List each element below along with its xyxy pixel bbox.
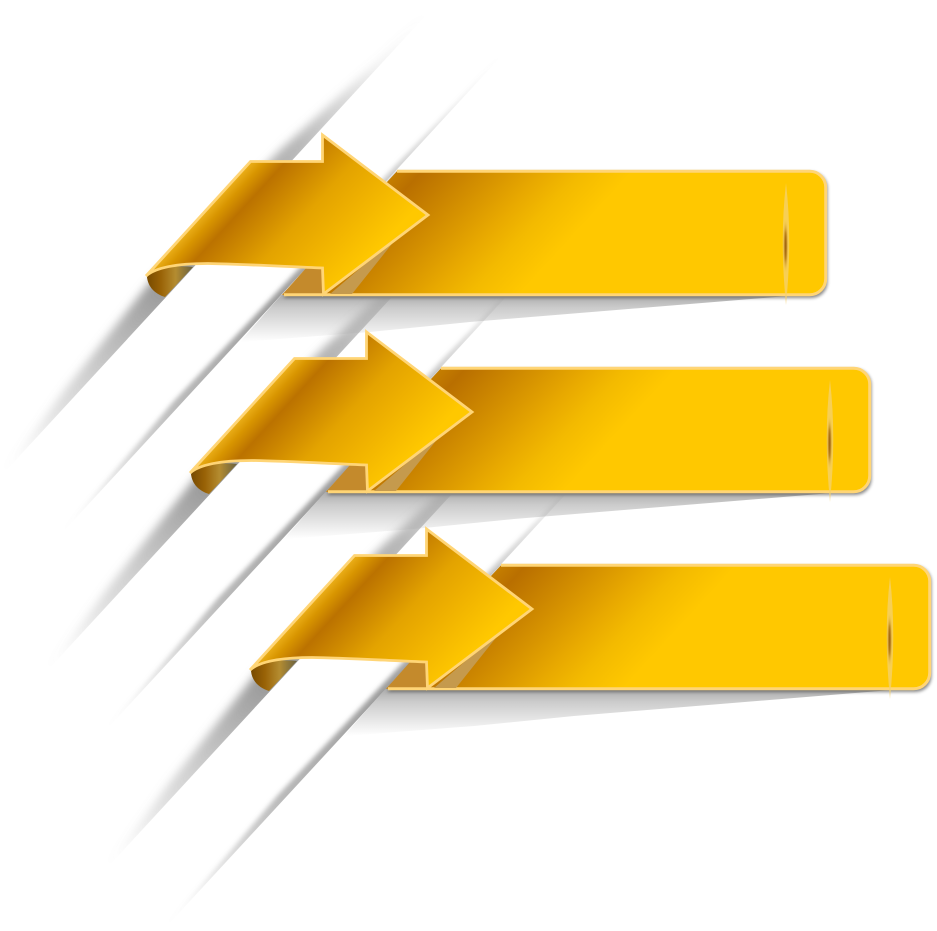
arrow cast shadow on banner xyxy=(330,235,399,294)
banner border xyxy=(284,171,826,295)
banner slit xyxy=(783,183,789,305)
shadow: under banner wedge xyxy=(350,689,888,730)
banner border xyxy=(388,565,930,689)
shadow: upper diagonal fold xyxy=(72,299,389,642)
banner outer shadow xyxy=(327,369,872,495)
banner outer shadow xyxy=(283,172,828,298)
shadow: lower diagonal fold xyxy=(90,93,466,502)
banner body xyxy=(326,368,870,492)
shadow: under banner wedge xyxy=(246,295,784,336)
shadow: lower diagonal fold xyxy=(194,504,556,896)
shadow: upper diagonal fold xyxy=(28,56,386,446)
banner body xyxy=(386,565,930,689)
banner body xyxy=(282,171,826,295)
banner slit xyxy=(887,577,893,699)
arrow xyxy=(146,135,428,294)
banner left tan section xyxy=(386,662,427,689)
arrow cast shadow on banner xyxy=(374,432,443,491)
banner outer shadow xyxy=(387,566,932,692)
shadow: lower diagonal fold xyxy=(135,308,496,698)
shadow: under banner wedge xyxy=(290,492,828,534)
arrow curl underside xyxy=(191,463,237,494)
shadow: upper diagonal fold xyxy=(132,496,449,840)
arrow xyxy=(250,529,532,688)
arrow xyxy=(190,332,472,491)
banner set 3 xyxy=(132,496,934,896)
banner set 1 xyxy=(4,10,828,533)
arrow curl underside xyxy=(147,266,193,297)
banner left tan section xyxy=(326,465,367,492)
arrow cast shadow on banner xyxy=(434,629,503,688)
banner left tan section xyxy=(282,268,323,295)
banner slit xyxy=(827,380,833,502)
banner border xyxy=(328,368,870,492)
banner set 2 xyxy=(72,299,887,730)
arrow curl underside xyxy=(251,660,297,691)
